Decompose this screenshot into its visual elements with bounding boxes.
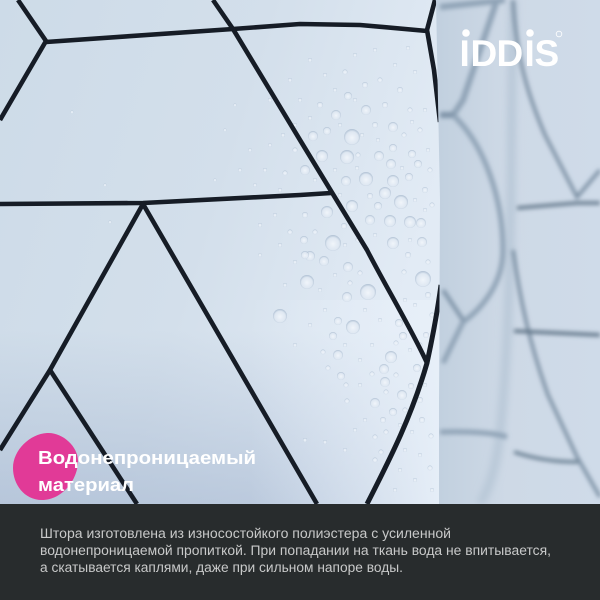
logo: IDDIS: IDDIS [460,33,559,74]
description text: Штора изготовлена из износостойкого полиэстера с усиленной [40,526,451,541]
pink blob behind heading [13,433,78,500]
black geometric curtain lines [0,0,441,504]
description text [40,526,551,575]
water droplets on fabric [70,46,434,492]
front curtain fabric [0,0,442,504]
heading: waterproof material: Водонепроницаемый [38,448,256,468]
description text: водонепроницаемой пропиткой. При попадании на ткань вода не впитывается, [40,543,551,558]
heading: waterproof material: материал [38,475,134,495]
description text: а скатывается каплями, даже при сильном напоре воды. [40,560,403,575]
heading: waterproof material [38,448,256,495]
background: blurred rear curtain [430,0,600,504]
dark bottom panel [0,504,600,600]
